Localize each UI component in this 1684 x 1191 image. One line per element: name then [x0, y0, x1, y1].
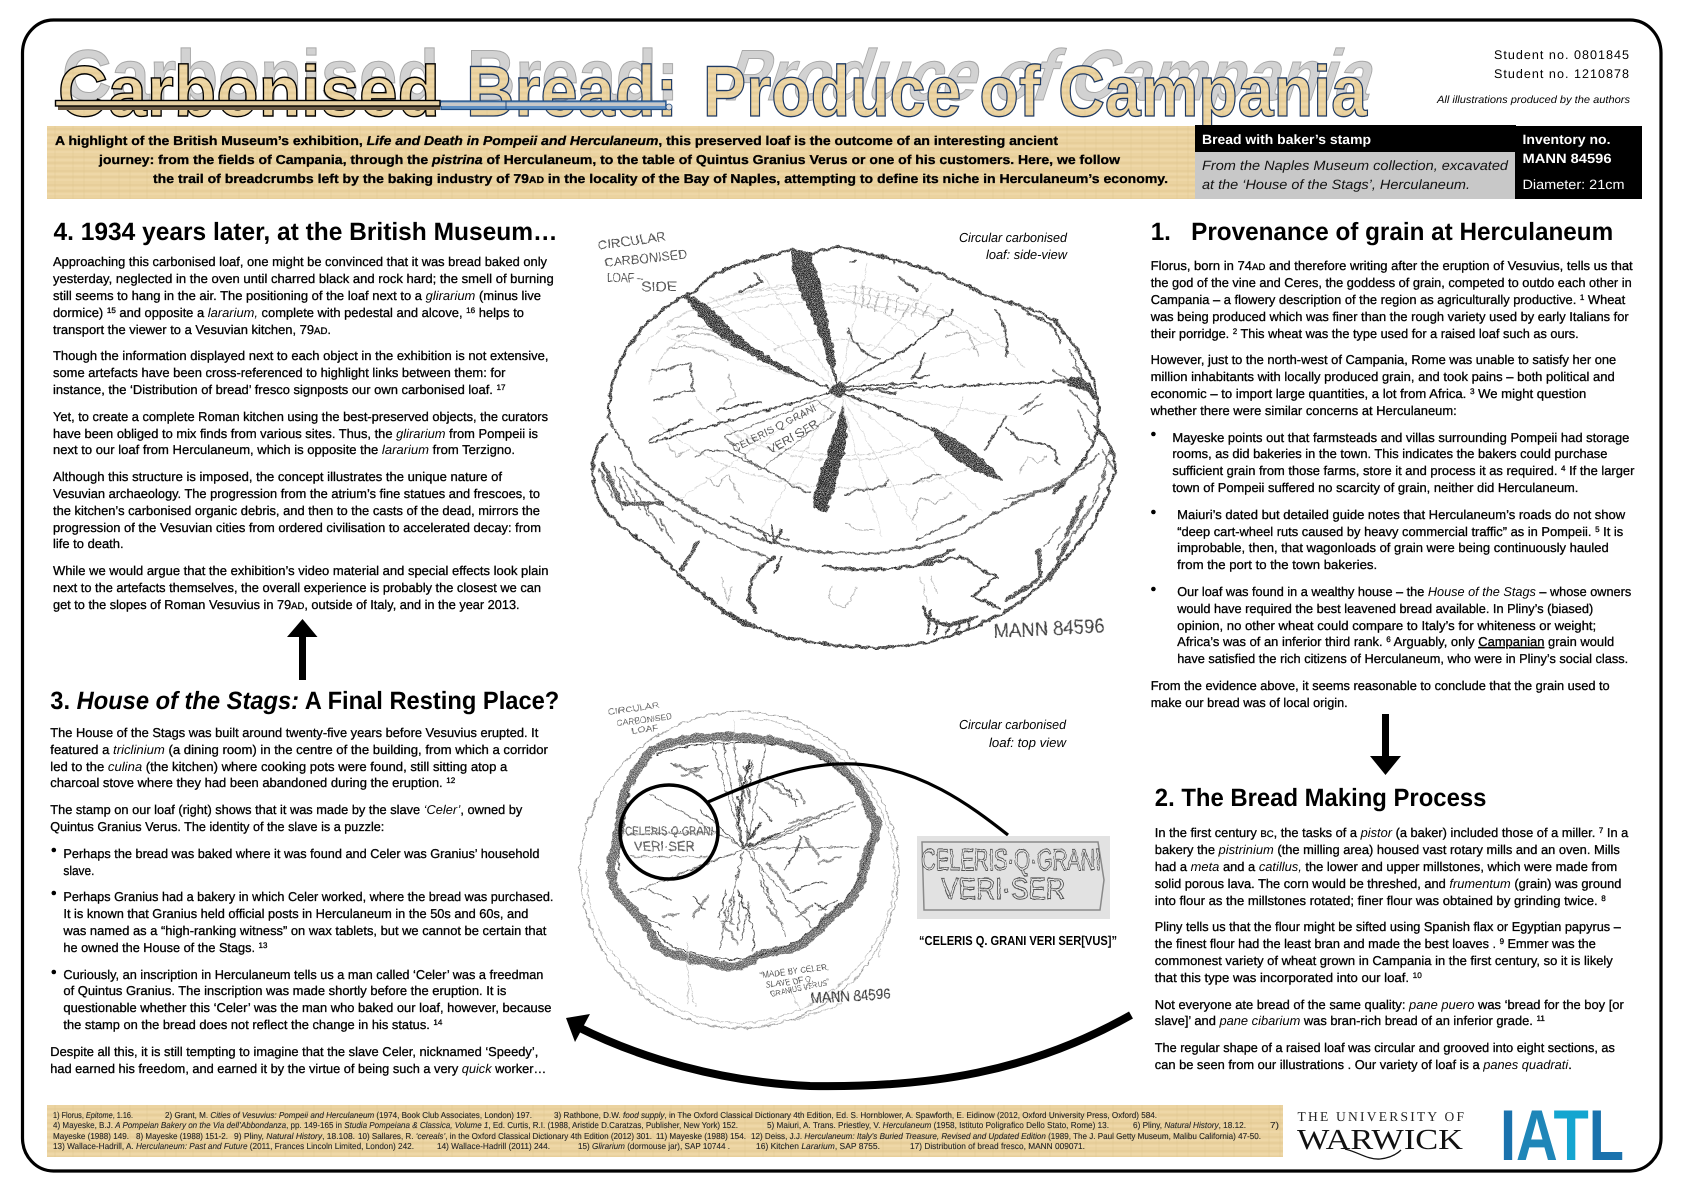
section 4 text: helps to [475, 305, 524, 320]
section 3 bullets: he owned the House of the Stags. [63, 940, 256, 955]
section 1 conclusion: make our bread was of local origin. [1151, 695, 1348, 710]
logo: University of Warwick [1297, 1109, 1464, 1159]
title shadow: Carbonised [62, 36, 439, 116]
handwritten note: maker: GRANIUS VERUS” [769, 977, 830, 999]
section 3 conclusion: had earned his freedom, and earned it by the virtue of being such a very quick worker… [50, 1061, 546, 1076]
stamp detail: VERI·SER [941, 873, 1065, 906]
section 1 text: 3 [1470, 387, 1475, 396]
panel: footnotes: 5) Maiuri, A. Trans. Priestley, V. Herculaneum (1958, Istituto Poligrafico Dello Stato, Rome) 13. [767, 1120, 1109, 1130]
section 1 bullets: Campanian grain would [1478, 634, 1613, 649]
stamp sketch on top view: VERI·SER [634, 838, 695, 854]
section 1 conclusion: From the evidence above, it seems reasonable to conclude that the grain used to [1151, 678, 1610, 693]
section 4 text: Although this structure is imposed, the concept illustrates the unique nature of [53, 469, 502, 484]
caption: side view: Circular carbonised [959, 230, 1068, 245]
panel: footnotes: 16) Kitchen Lararium, SAP 8755. [756, 1141, 880, 1151]
section 2 text: the finest flour had the least bran and made the best loaves . [1155, 936, 1498, 951]
stamp detail: CELERIS·Q·GRANI [921, 844, 1101, 877]
panel: footnotes: 12) Deiss, J.J. Herculaneum: Italy’s Buried Treasure, Revised and Updated Edition (1989, The J. Paul Getty Museum, Malibu California) 47-50. [751, 1131, 1261, 1141]
panel: object title: From the Naples Museum collection, excavated [1202, 158, 1509, 173]
caption: top view [959, 717, 1068, 750]
panel: footnotes: 7) [1270, 1120, 1279, 1130]
illustration: loaf top view [580, 700, 1008, 1028]
section 3 bullets [52, 846, 553, 1032]
loaf side sketch [593, 246, 1115, 648]
section 4 text: have been obliged to mix finds from various sites. Thus, the glirarium from Pompeii is [53, 426, 538, 441]
section 4 text: dormice) [53, 305, 103, 320]
panel: footnotes: 4) Mayeske, B.J. A Pompeian Bakery on the Via dell’Abbondanza, pp. 149-165 in Studia Pompeiana & Classica, Volume 1, Ed. Curtis, R.I. (1988, Aristide D.Caratzas, Publisher, New York) 152. [53, 1120, 738, 1130]
section 1 text: Wheat [1584, 292, 1626, 307]
heading 4: 4. 1934 years later, at the British Museum… [54, 218, 558, 246]
section 1 bullets: would have required the best leavened bread available. In Pliny’s (biased) [1176, 601, 1593, 616]
section 4 text: some artefacts have been cross-referenced to highlight links between them: for [53, 365, 506, 380]
section 1 text: 1 [1580, 293, 1585, 302]
section 3 bullets: was named as a “high-ranking witness” on wax tablets, but we cannot be certain that [62, 923, 547, 938]
section 2 text: solid porous lava. The corn would be threshed, and frumentum (grain) was ground [1155, 876, 1621, 891]
student numbers [1436, 48, 1631, 106]
section 4 text: Approaching this carbonised loaf, one might be convinced that it was bread baked only [53, 254, 548, 269]
connector curve [708, 764, 1008, 835]
section 4 text: next to our loaf from Herculaneum, which is opposite the lararium from Terzigno. [53, 442, 515, 457]
section 1 bullets: sufficient grain from those farms, store it and process it as required. [1172, 463, 1554, 478]
section 2 text: Emmer was the [1504, 936, 1596, 951]
panel: section 1 [1150, 218, 1635, 710]
panel: footnotes: 9) Pliny, Natural History, 18.108. [234, 1131, 355, 1141]
section 1 text: whether there were similar concerns at Herculaneum: [1150, 403, 1457, 418]
panel: footnotes: 14) Wallace-Hadrill (2011) 244. [437, 1141, 550, 1151]
section 4 text: and opposite a [116, 305, 208, 320]
stamp sketch on side view: VERI SER [766, 416, 821, 457]
section 2 text: commonest variety of wheat grown in Campania in the first century, so it is likely [1155, 953, 1613, 968]
section 3 bullets: the stamp on the bread does not reflect the change in his status. [63, 1017, 428, 1032]
panel: footnotes: 13) Wallace-Hadrill, A. Herculaneum: Past and Future (2011, Frances Lincoln Limited, London) 242. [53, 1141, 414, 1151]
section 3 text: led to the culina (the kitchen) where cooking pots were found, still sitting atop a [50, 759, 508, 774]
section 4 text: Vesuvian archaeology. The progression from the atrium’s fine statues and frescoes, to [53, 486, 540, 501]
section 3 bullets: of Quintus Granius. The inscription was made shortly before the eruption. It is [63, 983, 506, 998]
section 4 text: Though the information displayed next to each object in the exhibition is not extensive, [53, 348, 548, 363]
section 1 text: Campania – a flowery description of the region as agriculturally productive. [1151, 292, 1573, 307]
section 1 bullets: It is [1600, 524, 1623, 539]
panel: section 2 [1155, 784, 1629, 1072]
title strike bar [56, 100, 672, 110]
section 1 bullets: Our loaf was found in a wealthy house – the House of the Stags – whose owners [1177, 584, 1631, 599]
section 2 text [1155, 825, 1629, 1072]
section 3 bullets: slave. [63, 863, 94, 878]
handwritten label: top: CARBONISED [616, 711, 673, 728]
section 4 text: lararium, complete with pedestal and alcove, [208, 305, 461, 320]
section 3 bullets: 14 [433, 1018, 443, 1027]
panel: inventory details: Inventory no. [1522, 132, 1610, 147]
handwritten label: side: SIDE [641, 279, 677, 294]
section 2 text: bakery the pistrinium (the milling area) housed vast rotary mills and an oven. Mills [1155, 842, 1620, 857]
logo: University of Warwick: THE UNIVERSITY OF [1298, 1109, 1464, 1124]
section 4 text: Yet, to create a complete Roman kitchen using the best-preserved objects, the curators [53, 409, 548, 424]
section 2 text: Pliny tells us that the flour might be sifted using Spanish flax or Egyptian papyrus – [1155, 919, 1622, 934]
section 2 text: that this type was incorporated into our loaf. [1155, 970, 1402, 985]
panel: object title [1195, 125, 1516, 199]
logo: University of Warwick: WARWICK [1297, 1124, 1463, 1156]
stamp detail [917, 836, 1110, 919]
panel: footnotes: 15) Glirarium (dormouse jar), SAP 10744 . [578, 1141, 730, 1151]
logo: IATL: IATL [1500, 1096, 1624, 1176]
panel: footnotes: 6) Pliny, Natural History, 18.12. [1133, 1120, 1246, 1130]
section 4 text: yesterday, neglected in the oven until charred black and rock hard; the smell of burning [53, 271, 554, 286]
handwritten label: side [596, 229, 688, 294]
section 4 text: instance, the ‘Distribution of bread’ fresco signposts our own carbonised loaf. [53, 382, 488, 397]
section 4 text: progression of the Vesuvian cities from ordered civilisation to accelerated decay: from [53, 520, 541, 535]
section 4 text: 17 [496, 383, 506, 392]
title [56, 36, 1389, 132]
panel: inventory details: Diameter: 21cm [1522, 177, 1624, 192]
section 3 text [50, 725, 549, 834]
panel: footnotes: 11) Mayeske (1988) 154. [656, 1131, 746, 1141]
caption: side view: loaf: side-view [986, 247, 1069, 262]
handwritten label: top: CIRCULAR [607, 700, 660, 717]
handwritten label: side: CIRCULAR [596, 229, 667, 253]
panel: inventory details: MANN 84596 [1522, 151, 1612, 166]
stamp sketch on top view [625, 824, 713, 854]
section 2 text: into flour as the millstones rotated; finer flour was obtained by grinding twice. [1155, 893, 1588, 908]
title lettering: Bread: [466, 52, 678, 132]
section 1 text: million inhabitants with locally produced grain, and took pains – both political and [1151, 369, 1615, 384]
section 3 conclusion: Despite all this, it is still tempting to imagine that the slave Celer, nicknamed ‘Speedy’, [50, 1044, 538, 1059]
section 1 bullets: 5 [1595, 525, 1600, 534]
caption: top view: Circular carbonised [959, 717, 1067, 732]
panel: footnotes: 17) Distribution of bread fresco, MANN 009071. [910, 1141, 1085, 1151]
panel: introduction: journey: from the fields of Campania, through the pistrina of Herculaneum, to the table of Quintus Granius Verus or one of his customers. Here, we follow [98, 152, 1120, 167]
section 1 text [1150, 258, 1633, 418]
caption: side view [959, 230, 1069, 262]
heading 3: 3. House of the Stags: A Final Resting Place? [50, 687, 559, 715]
section 3 text: The stamp on our loaf (right) shows that it was made by the slave ‘Celer’, owned by [50, 802, 523, 817]
section 4 text [53, 254, 554, 612]
title shadow: Bread: [467, 36, 679, 116]
section 1 text: 2 [1233, 327, 1238, 336]
section 3 text: featured a triclinium (a dining room) in the centre of the building, from which a corridor [50, 742, 549, 757]
section 1 text: their porridge. [1151, 326, 1230, 341]
section 4 text: get to the slopes of Roman Vesuvius in 79AD, outside of Italy, and in the year 2013. [53, 597, 520, 612]
section 3 bullets: questionable whether this ‘Celer’ was the man who baked our loaf, however, because [63, 1000, 551, 1015]
panel: section 3 [50, 687, 559, 1076]
section 2 text: 9 [1500, 937, 1505, 946]
section 1 text: However, just to the north-west of Campania, Rome was unable to satisfy her one [1151, 352, 1616, 367]
section 1 text: the god of the vine and Ceres, the goddess of grain, competed to outdo each other in [1151, 275, 1632, 290]
section 1 bullets [1151, 430, 1635, 666]
student numbers: Student no. 1210878 [1494, 67, 1630, 81]
section 4 text: the kitchen’s carbonised organic debris, and then to the casts of the dead, mirrors the [53, 503, 540, 518]
panel: introduction [47, 126, 1195, 199]
section 2 text: can be seen from our illustrations . Our variety of loaf is a panes quadrati. [1155, 1057, 1572, 1072]
handwritten label: top: LOAF [631, 722, 659, 736]
section 3 bullets: Curiously, an inscription in Herculaneum tells us a man called ‘Celer’ was a freedman [63, 967, 543, 982]
section 4 text: life to death. [53, 536, 124, 551]
section 1 bullets: from the port to the town bakeries. [1177, 557, 1377, 572]
handwritten inventory: top: MANN 84596 [810, 986, 891, 1007]
section 4 text: 15 [107, 306, 116, 315]
section 1 bullets: Africa’s was of an inferior third rank. [1177, 634, 1380, 649]
section 4 text: still seems to hang in the air. The positioning of the loaf next to a glirarium (minus live [53, 288, 541, 303]
panel: introduction: A highlight of the British Museum’s exhibition, Life and Death in Pompeii and Herculaneum , this preserved loaf is the outcome of an interesting ancient [55, 133, 1059, 148]
stamp sketch on side view: CELERIS Q GRANI [731, 403, 818, 455]
section 1 conclusion [1151, 678, 1610, 710]
section 1 bullets: improbable, then, that wagonloads of grain were being continuously hauled [1177, 540, 1609, 555]
section 3 conclusion [50, 1044, 546, 1076]
panel: introduction: the trail of breadcrumbs left by the baking industry of 79 AD in the locality of the Bay of Naples, attempting to define its niche in Herculaneum’s economy. [153, 171, 1168, 186]
loaf top sketch [580, 712, 899, 1028]
section 3 text: The House of the Stags was built around twenty-five years before Vesuvius erupted. It [50, 725, 539, 740]
handwritten label: top [607, 700, 673, 736]
title shadow: Produce of Campania [717, 36, 1389, 116]
panel: section 4 [53, 218, 558, 612]
section 1 bullets: have satisfied the rich citizens of Herculaneum, who were in Pliny’s social class. [1177, 651, 1628, 666]
section 4 text: next to the artefacts themselves, the overall experience is probably the closest we can [53, 580, 541, 595]
handwritten label: side: CARBONISED [604, 246, 688, 270]
section 2 text: The regular shape of a raised loaf was circular and grooved into eight sections, as [1155, 1040, 1615, 1055]
title lettering: Produce of Campania [703, 52, 1368, 132]
panel: footnotes: 10) Sallares, R. ‘cereals’, in the Oxford Classical Dictionary 4th Edition (2012) 301. [358, 1131, 652, 1141]
title lettering [58, 52, 1368, 132]
panel: footnotes: 1) Florus, Epitome, 1.16. [53, 1110, 133, 1120]
arrow: section 3 up to section 4 [287, 619, 318, 680]
section 3 text: 12 [446, 776, 456, 785]
title lettering: Carbonised [58, 52, 440, 132]
section 2 text: had a meta and a catillus, the lower and upper millstones, which were made from [1155, 859, 1617, 874]
section 1 bullets: Maiuri’s dated but detailed guide notes that Herculaneum’s roads do not show [1177, 507, 1626, 522]
section 1 text: We might question [1475, 386, 1586, 401]
illustration: loaf side view [593, 229, 1115, 648]
magnifier circle [620, 785, 718, 879]
section 2 text: 8 [1601, 894, 1606, 903]
student numbers: Student no. 0801845 [1494, 48, 1630, 62]
section 1 text: Florus, born in 74AD and therefore writing after the eruption of Vesuvius, tells us that [1151, 258, 1633, 273]
section 1 bullets: “deep cart-wheel ruts caused by heavy commercial traffic” as in Pompeii. [1177, 524, 1589, 539]
title shadow [62, 36, 1389, 116]
section 1 bullets: Arguably, only [1391, 634, 1478, 649]
handwritten label: side: LOAF – [607, 270, 644, 285]
section 2 text: 7 [1599, 826, 1604, 835]
panel: footnotes: 2) Grant, M. Cities of Vesuvius: Pompeii and Herculaneum (1974, Book Club Associates, London) 197. [165, 1110, 532, 1120]
stamp caption: “CELERIS Q. GRANI VERI SER[VUS]” [919, 933, 1117, 948]
section 1 bullets: 4 [1561, 464, 1566, 473]
section 1 text: was being produced which was finer than the rough variety used by early Italians for [1150, 309, 1629, 324]
panel: object title: at the ‘House of the Stags’, Herculaneum. [1202, 177, 1470, 192]
arrow: section 1 down to section 2 [1370, 714, 1401, 775]
student numbers: All illustrations produced by the authors [1436, 94, 1631, 106]
panel: footnotes [47, 1105, 1283, 1157]
section 4 text: 16 [466, 306, 476, 315]
section 1 bullets: 6 [1386, 635, 1391, 644]
stamp sketch on top view: CELERIS·Q·GRANI [625, 824, 713, 838]
section 1 bullets: If the larger [1566, 463, 1635, 478]
panel: footnotes: 8) Mayeske (1988) 151-2. [136, 1131, 228, 1141]
section 3 bullets: 13 [259, 941, 268, 950]
section 1 bullets: town of Pompeii suffered no scarcity of grain, neither did Herculaneum. [1172, 480, 1578, 495]
section 2 text: slave]’ and pane cibarium was bran-rich bread of an inferior grade. [1155, 1013, 1532, 1028]
section 3 bullets: Perhaps Granius had a bakery in which Celer worked, where the bread was purchased. [63, 889, 553, 904]
section 4 text: transport the viewer to a Vesuvian kitchen, 79 AD. [53, 322, 331, 337]
section 3 bullets: Perhaps the bread was baked where it was found and Celer was Granius’ household [63, 846, 539, 861]
caption: top view: loaf: top view [989, 735, 1068, 750]
section 2 text: 11 [1536, 1014, 1545, 1023]
handwritten note: maker [759, 962, 830, 999]
arrow: section 2 to section 3 [566, 1014, 1131, 1086]
heading 2: 2. The Bread Making Process [1155, 784, 1486, 812]
section 1 bullets: rooms, as did bakeries in the town. This indicates the bakers could purchase [1172, 446, 1607, 461]
section 2 text: 10 [1413, 971, 1422, 980]
section 1 text: economic – to import large quantities, a lot from Africa. [1151, 386, 1459, 401]
heading 1: 1. Provenance of grain at Herculaneum [1151, 218, 1613, 246]
panel: footnotes: Mayeske (1988) 149. [53, 1131, 129, 1141]
section 2 text: In the first century BC, the tasks of a pistor (a baker) included those of a miller. [1155, 825, 1595, 840]
handwritten note: maker: SLAVE OF Q. [765, 973, 814, 990]
section 3 bullets: It is known that Granius held official posts in Herculaneum in the 50s and 60s, and [63, 906, 528, 921]
section 1 bullets: opinion, no other wheat could compare to Italy’s for whiteness or weight; [1177, 618, 1596, 633]
panel: inventory details [1515, 126, 1642, 199]
section 1 bullets: Mayeske points out that farmsteads and villas surrounding Pompeii had storage [1172, 430, 1629, 445]
section 1 text: This wheat was the type used for a raised loaf such as ours. [1237, 326, 1579, 341]
panel: object title: Bread with baker’s stamp [1202, 132, 1371, 147]
section 3 text: Quintus Granius Verus. The identity of the slave is a puzzle: [50, 819, 384, 834]
handwritten inventory: side: MANN 84596 [993, 615, 1105, 643]
handwritten note: maker: “MADE BY CELER, [759, 962, 830, 980]
section 2 text: Not everyone ate bread of the same quality: pane puero was ‘bread for the boy [or [1155, 997, 1625, 1012]
section 2 text: In a [1603, 825, 1629, 840]
panel: footnotes: 3) Rathbone, D.W. food supply, in The Oxford Classical Dictionary 4th Edition, Ed. S. Hornblower, A. Spawforth, E. Eidinow (2012, Oxford University Press, Oxford) 584. [554, 1110, 1157, 1120]
section 4 text: While we would argue that the exhibition’s video material and special effects look plain [53, 563, 548, 578]
section 3 text: charcoal stove where they had been abandoned during the eruption. [50, 775, 437, 790]
